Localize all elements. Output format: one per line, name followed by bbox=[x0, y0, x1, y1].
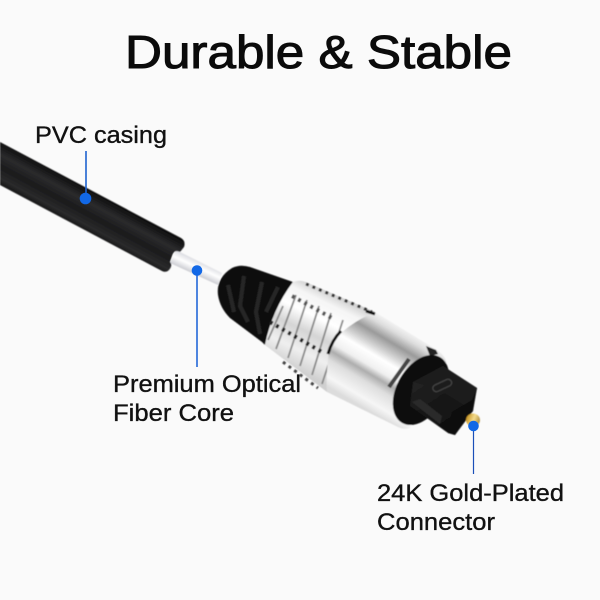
smooth metal barrel bbox=[327, 311, 446, 429]
callout: gold connector bbox=[377, 421, 564, 536]
illustration: optical cable bbox=[0, 142, 480, 435]
leader line bbox=[85, 151, 87, 198]
label: 24K Gold-Plated bbox=[377, 480, 564, 507]
black collar bbox=[381, 345, 461, 435]
title: Durable & Stable bbox=[125, 26, 512, 78]
pvc casing bbox=[0, 142, 185, 272]
marker dot bbox=[468, 421, 479, 431]
knurled metal sleeve bbox=[265, 281, 375, 392]
marker dot bbox=[192, 265, 202, 276]
gold pin bbox=[466, 414, 480, 426]
label: Premium Optical bbox=[113, 371, 301, 398]
callout: optical fiber core bbox=[113, 265, 301, 427]
square plug bbox=[410, 366, 477, 435]
leader line bbox=[196, 271, 198, 367]
callout: PVC casing bbox=[35, 122, 167, 204]
label: PVC casing bbox=[35, 122, 167, 149]
leader line bbox=[472, 426, 474, 474]
rubber boot bbox=[218, 266, 293, 345]
label: Fiber Core bbox=[113, 400, 234, 427]
marker dot bbox=[80, 193, 91, 204]
fiber core bbox=[170, 250, 222, 285]
label: Connector bbox=[377, 509, 495, 536]
